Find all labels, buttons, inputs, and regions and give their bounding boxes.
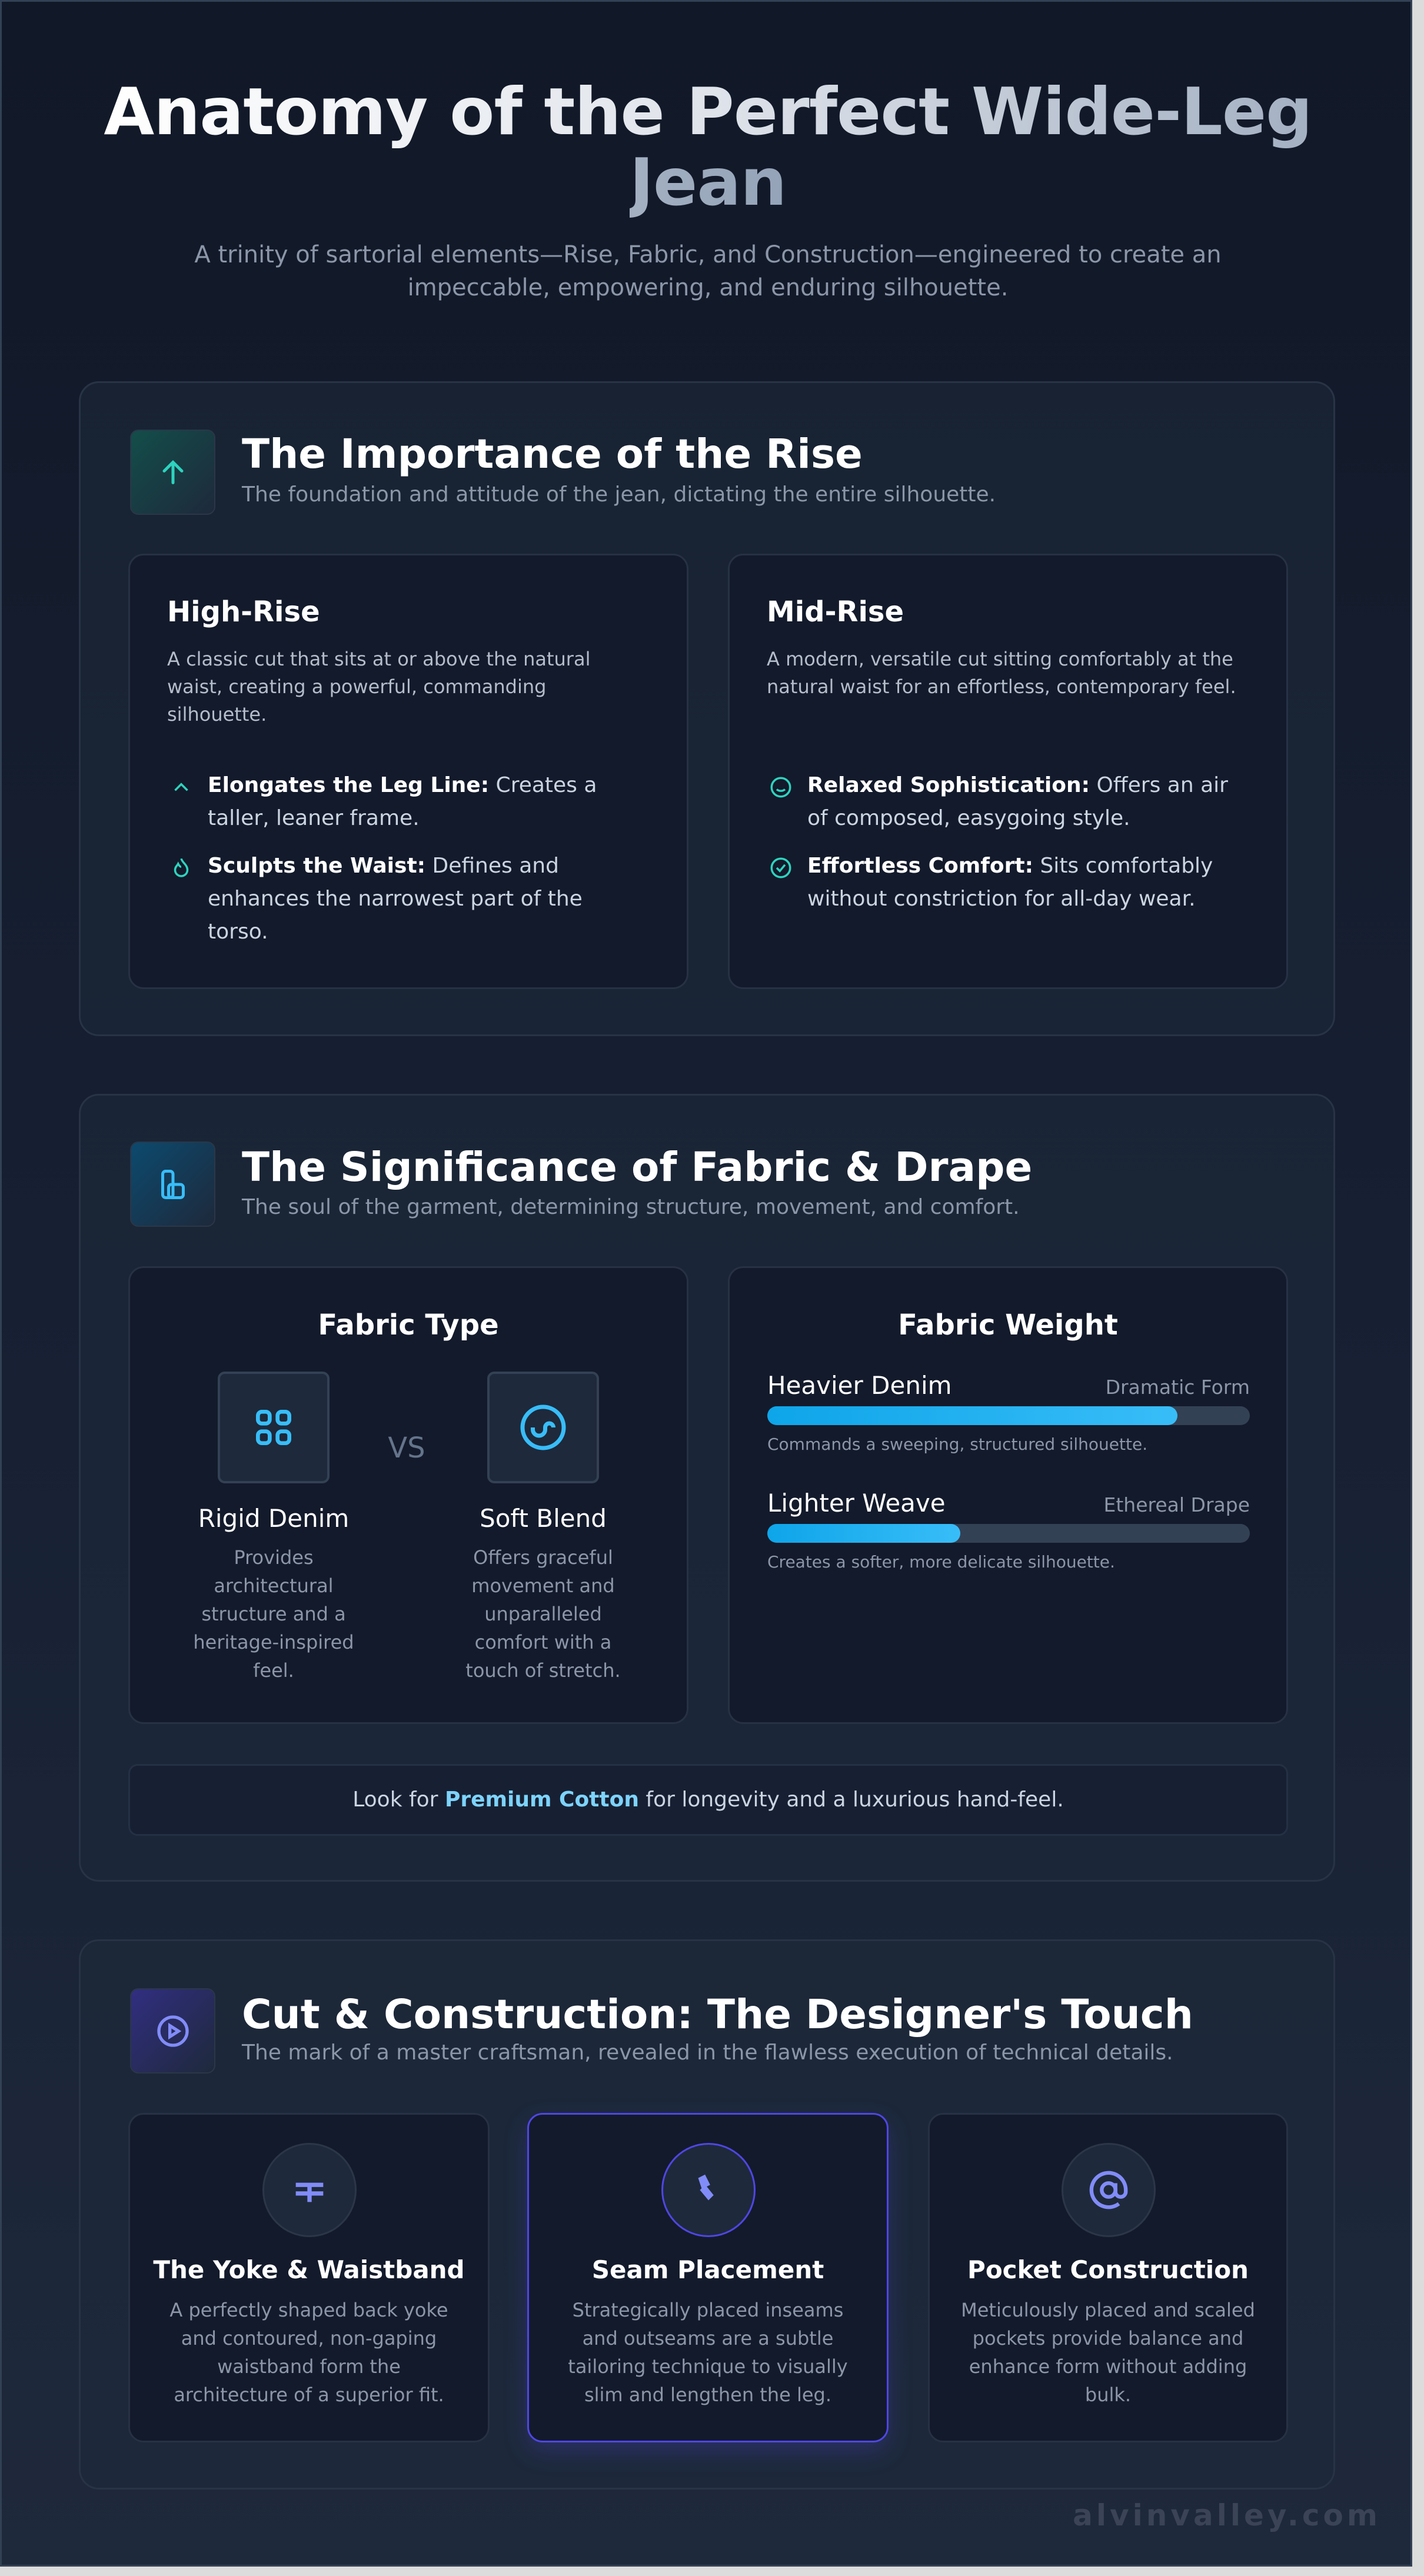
text: soft blend xyxy=(465,1504,621,1682)
card: fabric type: Fabric Type xyxy=(318,1309,499,1342)
card: seam (highlighted) xyxy=(527,2113,889,2442)
heading: fabric: The Significance of Fabric & Drape xyxy=(242,1144,1032,1191)
watermark: alvinvalley.com xyxy=(1073,2498,1381,2532)
heading: rise: The Importance of the Rise xyxy=(242,431,863,478)
card: yoke: The Yoke & Waistband xyxy=(153,2255,465,2284)
title xyxy=(104,74,1312,221)
icon: fabric xyxy=(130,1141,215,1227)
card: yoke: A perfectly shaped back yoke xyxy=(169,2299,448,2321)
card: pocket xyxy=(928,2113,1288,2442)
text: rigid denim: heritage-inspired xyxy=(193,1631,354,1653)
bullet: relaxed: of composed, easygoing style. xyxy=(807,806,1130,830)
card: yoke xyxy=(128,2113,490,2442)
bar: lighter weave xyxy=(767,1489,1250,1572)
bar: heavier denim: Heavier Denim xyxy=(767,1371,952,1400)
text: rigid denim xyxy=(193,1504,354,1682)
subtitle xyxy=(194,241,1222,301)
card: seam (highlighted): slim and lengthen the leg. xyxy=(584,2384,831,2406)
card: fabric type xyxy=(128,1266,688,1724)
bar: lighter weave: Lighter Weave xyxy=(767,1489,946,1517)
bullet: comfort: Effortless Comfort: Sits comfortably xyxy=(807,854,1213,878)
card: mid-rise: Mid-Rise xyxy=(767,595,904,628)
card: fabric weight xyxy=(728,1266,1288,1724)
bullet: elongates xyxy=(174,773,597,830)
card: pocket: enhance form without adding xyxy=(969,2355,1247,2378)
card: high-rise: waist, creating a powerful, commanding xyxy=(167,675,546,698)
bullet: elongates: Elongates the Leg Line: Creates a xyxy=(208,773,597,797)
bullet: relaxed xyxy=(771,773,1228,830)
card: pocket: pockets provide balance and xyxy=(973,2327,1243,2349)
callout: premium cotton: Look for Premium Cotton for longevity and a luxurious hand-feel. xyxy=(352,1788,1064,1812)
text: soft blend: touch of stretch. xyxy=(465,1659,621,1682)
text: rigid denim: Rigid Denim xyxy=(198,1504,349,1533)
title: Anatomy of the Perfect Wide-Leg xyxy=(104,74,1312,150)
bar: lighter weave: Creates a softer, more delicate silhouette. xyxy=(767,1552,1115,1572)
subtitle: A trinity of sartorial elements—Rise, Fabric, and Construction—engineered to create an xyxy=(194,241,1222,268)
icon: rigid denim xyxy=(218,1372,330,1483)
bullet: elongates: taller, leaner frame. xyxy=(208,806,420,830)
icon: soft blend xyxy=(487,1372,599,1483)
title: Jean xyxy=(630,145,786,221)
panel: fabric xyxy=(79,1094,1335,1882)
text: rigid denim: Provides xyxy=(234,1546,314,1569)
bar: heavier denim: Commands a sweeping, structured silhouette. xyxy=(767,1435,1147,1454)
card: high-rise xyxy=(128,554,688,989)
bullet: sculpts xyxy=(174,854,583,944)
card: mid-rise: natural waist for an effortless, contemporary feel. xyxy=(767,675,1236,698)
text: soft blend: Offers graceful xyxy=(473,1546,613,1569)
card: pocket: Pocket Construction xyxy=(967,2255,1249,2284)
card: fabric weight: Fabric Weight xyxy=(898,1309,1118,1342)
card: yoke: waistband form the xyxy=(217,2355,401,2378)
text: soft blend: unparalleled xyxy=(484,1603,602,1625)
subheading: fabric: The soul of the garment, determining structure, movement, and comfort. xyxy=(242,1195,1020,1219)
card: yoke: architecture of a superior fit. xyxy=(174,2384,444,2406)
card: high-rise: A classic cut that sits at or above the natural xyxy=(167,648,590,670)
card: mid-rise xyxy=(728,554,1288,989)
bar: lighter weave: Ethereal Drape xyxy=(1104,1493,1250,1516)
text: soft blend: comfort with a xyxy=(475,1631,611,1653)
card: high-rise: High-Rise xyxy=(167,595,320,628)
card: pocket: Meticulously placed and scaled xyxy=(961,2299,1255,2321)
card: mid-rise: A modern, versatile cut sitting comfortably at the xyxy=(767,648,1233,670)
subtitle: impeccable, empowering, and enduring silhouette. xyxy=(408,274,1008,301)
bullet: sculpts: torso. xyxy=(208,920,268,944)
card: seam (highlighted): Strategically placed inseams xyxy=(573,2299,843,2321)
card: seam (highlighted): and outseams are a subtle xyxy=(583,2327,833,2349)
text: rigid denim: structure and a xyxy=(201,1603,346,1625)
text: rigid denim: architectural xyxy=(214,1575,334,1597)
bar: heavier denim xyxy=(767,1371,1250,1454)
card: pocket: bulk. xyxy=(1085,2384,1131,2406)
panel: construction xyxy=(79,1939,1335,2490)
bullet: sculpts: enhances the narrowest part of the xyxy=(208,887,583,911)
subheading: construction: The mark of a master craftsman, revealed in the flawless execution of technical details. xyxy=(242,2041,1173,2065)
callout: premium cotton xyxy=(128,1764,1288,1836)
bullet: sculpts: Sculpts the Waist: Defines and xyxy=(208,854,559,878)
icon: arrow up xyxy=(130,430,215,515)
bar: heavier denim: Dramatic Form xyxy=(1106,1376,1250,1399)
subheading: rise: The foundation and attitude of the jean, dictating the entire silhouette. xyxy=(242,482,996,507)
text: rigid denim: feel. xyxy=(253,1659,294,1682)
card: yoke: and contoured, non-gaping xyxy=(181,2327,437,2349)
vs: VS xyxy=(388,1432,425,1465)
text: soft blend: Soft Blend xyxy=(480,1504,607,1533)
icon: play xyxy=(130,1988,215,2074)
bullet: comfort: without constriction for all-day wear. xyxy=(807,887,1196,911)
card: seam (highlighted): Seam Placement xyxy=(592,2255,824,2284)
card: high-rise: silhouette. xyxy=(167,703,267,725)
heading: construction: Cut & Construction: The Designer's Touch xyxy=(242,1991,1193,2038)
bullet: comfort xyxy=(771,854,1213,911)
card: seam (highlighted): tailoring technique to visually xyxy=(568,2355,848,2378)
bullet: relaxed: Relaxed Sophistication: Offers an air xyxy=(807,773,1228,797)
text: soft blend: movement and xyxy=(471,1575,615,1597)
panel: rise xyxy=(79,381,1335,1036)
